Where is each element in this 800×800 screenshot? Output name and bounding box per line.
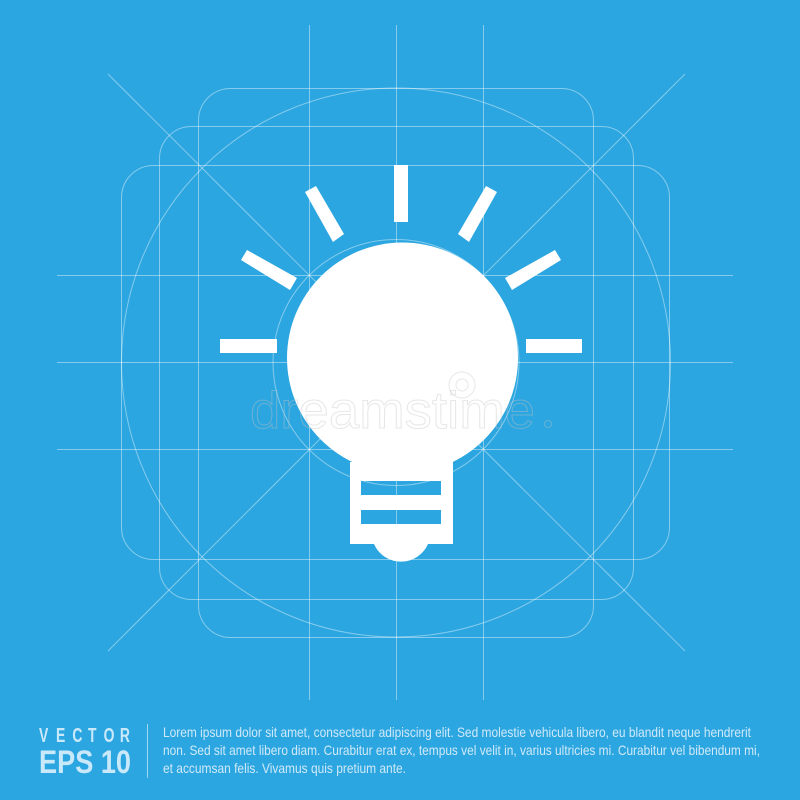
construction grid (57, 25, 733, 700)
footer: description text: et accumsan felis. Vivamus quis pretium ante. (163, 760, 406, 776)
footer: vector label: EPS 10 (39, 744, 131, 780)
footer: description text (163, 724, 760, 776)
footer divider (146, 724, 148, 778)
watermark: dreamstime (250, 382, 535, 440)
bulb base (350, 462, 453, 562)
footer: vector label (39, 723, 131, 780)
light rays (220, 165, 582, 353)
bulb glass (287, 242, 518, 474)
icon: light bulb (220, 165, 582, 562)
footer: vector label: VECTOR (39, 723, 130, 747)
